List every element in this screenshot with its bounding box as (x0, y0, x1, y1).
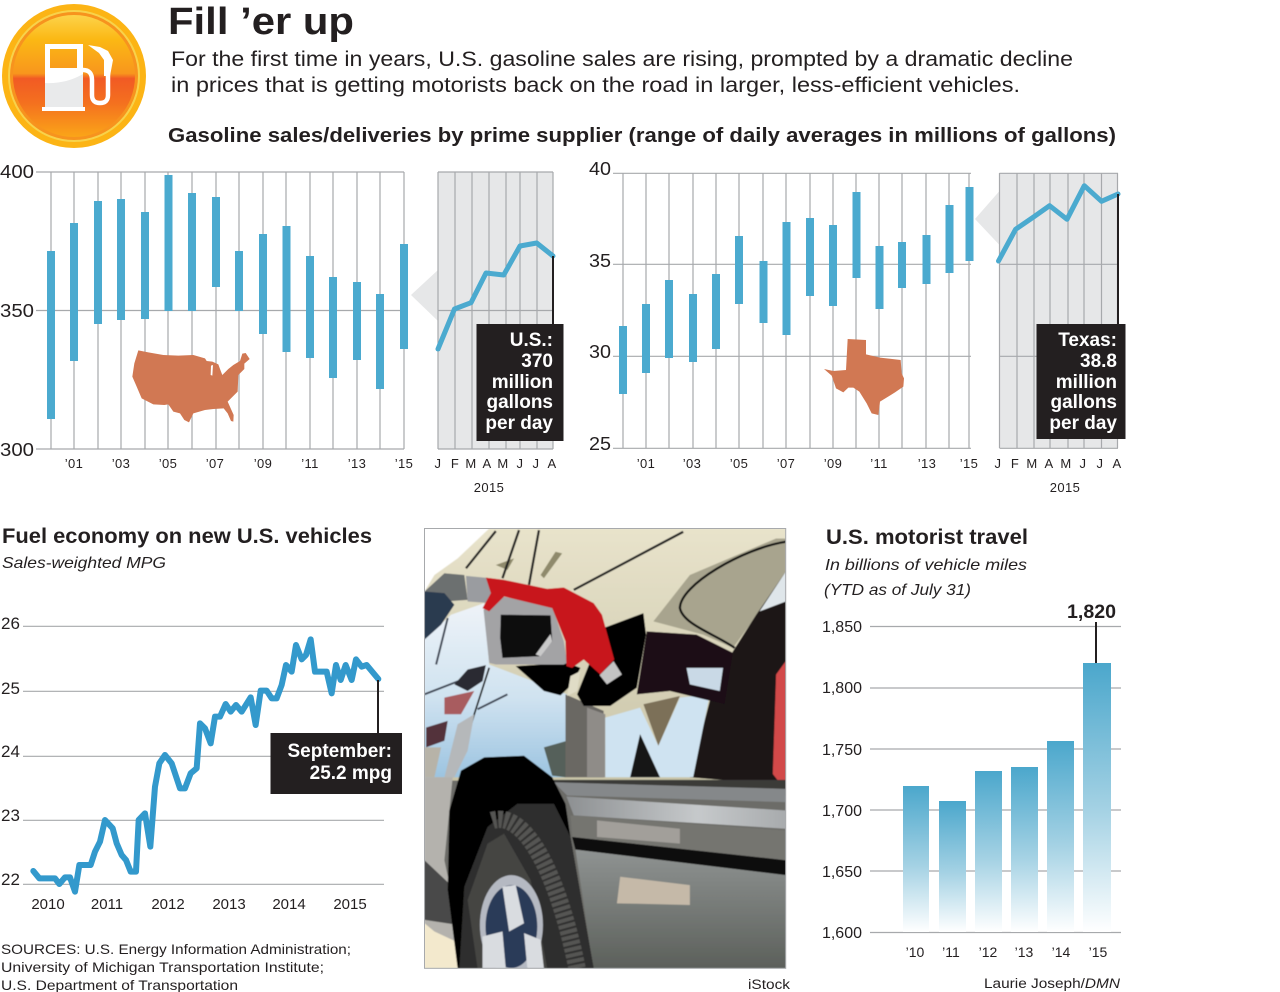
y-axis labels: Texas: 25 (589, 434, 611, 454)
icon: fuel pump badge (2, 4, 146, 148)
y-axis labels: motorist travel: 1,600 (822, 925, 862, 942)
x-axis years: motorist travel: ’11 (942, 944, 960, 960)
map: United States (132, 350, 250, 422)
x-axis years: motorist travel: ’12 (979, 944, 998, 960)
y-axis labels: Texas: 40 (589, 159, 611, 179)
x-axis years: Texas: ’11 (870, 456, 888, 471)
heading: fuel economy: Fuel economy on new U.S. vehicles (2, 525, 372, 548)
year label: U.S. inset: 2015 (474, 480, 504, 495)
x-axis years: U.S. (65, 456, 413, 471)
credit: Laurie Joseph: Laurie Joseph/ DMN (984, 976, 1120, 991)
intro text: For the first time in years, U.S. gasoline sales are rising, prompted by a dramatic decline (171, 48, 1073, 71)
panel: Texas range chart (589, 159, 978, 471)
callout: U.S. 370 million: per day (485, 413, 553, 434)
y-axis labels: U.S. (0, 162, 34, 460)
month labels: Texas (995, 456, 1122, 471)
x-axis years: U.S.: ’07 (206, 456, 224, 471)
panel: U.S. range chart (0, 162, 413, 471)
x-axis years: motorist travel: ’15 (1089, 944, 1108, 960)
x-axis years: Texas: ’05 (730, 456, 748, 471)
x-axis years: U.S.: ’13 (348, 456, 366, 471)
month labels: U.S.: M (465, 456, 477, 471)
map: Texas (824, 339, 904, 415)
x-axis years: fuel economy: 2010 (31, 896, 65, 913)
heading: motorist travel: (YTD as of July 31) (824, 582, 971, 599)
month labels: U.S.: M (497, 456, 509, 471)
callout: September 25.2 mpg: September: (287, 741, 392, 762)
range bars: U.S. (47, 175, 408, 419)
y-axis labels: fuel economy: 23 (1, 806, 20, 825)
photo: fuel nozzle in SUV (424, 528, 786, 975)
month labels: Texas: F (1011, 456, 1019, 471)
month labels: U.S.: A (547, 456, 557, 471)
sources: University of Michigan Transportation Institute; (1, 959, 324, 975)
y-axis labels: fuel economy: 25 (1, 679, 20, 698)
y-axis labels: fuel economy: 22 (1, 870, 20, 889)
month labels: U.S. (435, 456, 557, 471)
line: Texas 2015 (998, 186, 1118, 261)
heading: fuel economy: Sales-weighted MPG (2, 555, 166, 572)
x-axis years: U.S.: ’11 (301, 456, 319, 471)
callout: U.S. 370 million: U.S.: (510, 330, 553, 351)
y-axis labels: motorist travel: 1,700 (822, 803, 862, 820)
y-axis labels: Texas: 30 (589, 342, 611, 362)
arrow: Texas inset pointer (975, 191, 1000, 245)
callout: U.S. 370 million: gallons (486, 392, 553, 413)
month labels: U.S.: F (451, 456, 459, 471)
callout: U.S. 370 million: 370 (521, 351, 553, 372)
x-axis years: U.S.: ’03 (112, 456, 130, 471)
chart: motorist travel bars (822, 602, 1121, 960)
x-axis years: U.S.: ’01 (65, 456, 83, 471)
month labels: U.S.: J (517, 456, 523, 471)
callout: Texas 38.8 million (1036, 324, 1126, 439)
x-axis years: fuel economy: 2015 (333, 896, 367, 913)
x-axis years: U.S.: ’05 (159, 456, 177, 471)
x-axis years: Texas: ’09 (824, 456, 842, 471)
x-axis years: fuel economy: 2011 (91, 896, 123, 913)
y-axis labels: Texas (589, 159, 611, 454)
y-axis labels: fuel economy: 24 (1, 742, 20, 761)
x-axis years: motorist travel: ’13 (1015, 944, 1034, 960)
callout: U.S. 370 million (476, 324, 564, 441)
heading: fuel economy (2, 525, 372, 572)
x-axis years: Texas: ’13 (918, 456, 936, 471)
x-axis years: Texas: ’07 (777, 456, 795, 471)
y-axis labels: U.S.: 350 (0, 301, 34, 321)
month labels: Texas: M (1060, 456, 1072, 471)
x-axis years: fuel economy (31, 896, 367, 913)
callout: Texas 38.8 million: Texas: (1058, 330, 1117, 351)
bars: motorist travel (903, 663, 1111, 932)
chart: fuel economy line (1, 614, 402, 913)
heading: motorist travel: U.S. motorist travel (826, 526, 1028, 549)
y-axis labels: fuel economy (1, 614, 20, 889)
y-axis labels: U.S.: 400 (0, 162, 34, 182)
callout: September 25.2 mpg (270, 733, 402, 794)
month labels: U.S.: J (533, 456, 539, 471)
x-axis years: U.S.: ’15 (395, 456, 413, 471)
heading: motorist travel: In billions of vehicle miles (825, 557, 1027, 574)
callout: Texas 38.8 million: 38.8 (1080, 351, 1117, 372)
x-axis years: fuel economy: 2012 (151, 896, 185, 913)
x-axis years: U.S.: ’09 (254, 456, 272, 471)
callout: U.S. 370 million: million (492, 372, 553, 393)
arrow: U.S. inset pointer (411, 270, 438, 321)
value label: 1,820: 1,820 (1067, 602, 1116, 623)
panel: Texas 2015 inset (995, 173, 1126, 495)
year label: Texas inset: 2015 (1050, 480, 1080, 495)
x-axis years: Texas: ’15 (960, 456, 978, 471)
y-axis labels: motorist travel: 1,650 (822, 864, 862, 881)
sources (1, 941, 351, 992)
x-axis years: motorist travel: ’10 (906, 944, 925, 960)
x-axis years: motorist travel: ’14 (1052, 944, 1071, 960)
y-axis labels: motorist travel: 1,800 (822, 680, 862, 697)
month labels: Texas: J (1080, 456, 1086, 471)
heading: motorist travel (824, 526, 1028, 599)
y-axis labels: Texas: 35 (589, 251, 611, 271)
month labels: Texas: A (1112, 456, 1122, 471)
value label: 1,820 (1067, 602, 1116, 663)
title: Fill ’er up (168, 1, 354, 43)
intro text (171, 48, 1073, 97)
range bars: Texas (619, 187, 974, 394)
month labels: U.S.: J (435, 456, 441, 471)
x-axis years: Texas: ’03 (683, 456, 701, 471)
callout: Texas 38.8 million: gallons (1050, 392, 1117, 413)
month labels: Texas: M (1026, 456, 1038, 471)
month labels: Texas: J (995, 456, 1001, 471)
sources: SOURCES: U.S. Energy Information Administration; (1, 941, 351, 957)
line: mpg (33, 639, 378, 892)
x-axis years: motorist travel (906, 944, 1108, 960)
month labels: Texas: J (1097, 456, 1103, 471)
month labels: U.S.: A (482, 456, 492, 471)
line: U.S. 2015 (438, 243, 553, 349)
x-axis years: Texas: ’01 (637, 456, 655, 471)
callout: Texas 38.8 million: per day (1049, 413, 1117, 434)
y-axis labels: motorist travel (822, 619, 862, 942)
x-axis years: fuel economy: 2013 (212, 896, 246, 913)
y-axis labels: motorist travel: 1,750 (822, 742, 862, 759)
x-axis years: Texas (637, 456, 978, 471)
y-axis labels: U.S.: 300 (0, 440, 34, 460)
photo credit: iStock (748, 977, 790, 992)
callout: Texas 38.8 million: million (1056, 372, 1117, 393)
intro text: in prices that is getting motorists back on the road in larger, less-efficient vehicles. (171, 74, 1020, 97)
subheading: gasoline sales: Gasoline sales/deliveries by prime supplier (range of daily averages in millions of gallons) (168, 125, 1116, 147)
callout: September 25.2 mpg: 25.2 mpg (310, 763, 392, 784)
panel: U.S. 2015 inset (435, 172, 564, 495)
month labels: Texas: A (1044, 456, 1054, 471)
x-axis years: fuel economy: 2014 (272, 896, 306, 913)
y-axis labels: fuel economy: 26 (1, 614, 20, 633)
y-axis labels: motorist travel: 1,850 (822, 619, 862, 636)
